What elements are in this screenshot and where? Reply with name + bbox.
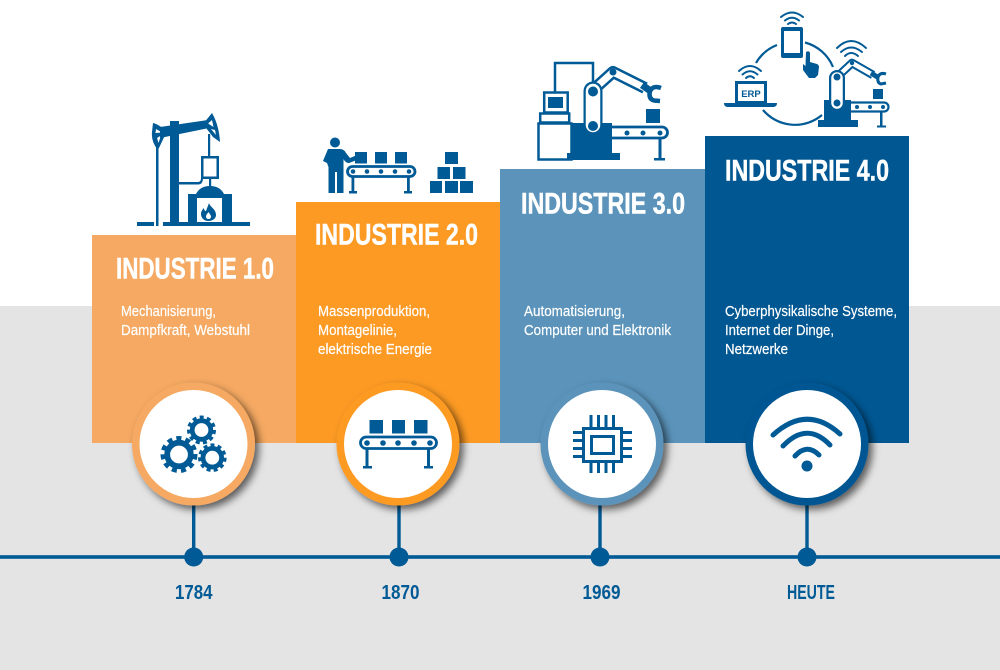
text: Industrie 2.0 description: Massenproduktion, (318, 304, 430, 320)
panel: Industrie 1.0 (92, 235, 296, 443)
panel: Industrie 2.0 (296, 202, 500, 443)
heading: Industrie 3.0: INDUSTRIE 3.0 (521, 188, 685, 220)
icon: robot arm and computer (538, 63, 668, 160)
text: Industrie 4.0 description: Cyberphysikalische Systeme, (725, 304, 897, 320)
wifi signals (739, 12, 866, 78)
text: Industrie 1.0 description: Mechanisierung, (121, 304, 216, 320)
badge: microchip (540, 382, 664, 506)
ERP label: ERP (741, 89, 761, 100)
year: 1969: 1969 (582, 581, 620, 604)
hand (803, 51, 819, 78)
text: Industrie 2.0 description (318, 304, 432, 358)
text: Industrie 4.0 description (725, 304, 897, 358)
heading: Industrie 4.0: INDUSTRIE 4.0 (725, 154, 889, 188)
text: Industrie 1.0 description (121, 304, 250, 339)
tablet (781, 27, 803, 58)
panel: Industrie 4.0 (705, 136, 909, 443)
icon: connected systems (724, 12, 888, 128)
text: Industrie 3.0 description (524, 304, 672, 339)
text: Industrie 2.0 description: Montagelinie, (318, 323, 397, 339)
year: heute: HEUTE (787, 581, 835, 604)
text: Industrie 1.0 description: Dampfkraft, Webstuhl (121, 323, 250, 339)
text: Industrie 4.0 description: Netzwerke (725, 342, 788, 358)
badge: wifi (746, 382, 868, 506)
text: Industrie 3.0 description: Automatisierung, (524, 304, 625, 320)
timeline (0, 505, 1000, 566)
icon: worker at conveyor with boxes (323, 138, 473, 194)
laptop (724, 81, 777, 107)
heading: Industrie 1.0: INDUSTRIE 1.0 (116, 252, 274, 286)
text: Industrie 2.0 description: elektrische Energie (318, 342, 432, 358)
heading: Industrie 2.0: INDUSTRIE 2.0 (315, 218, 478, 252)
grey background band (0, 306, 1000, 670)
robot (824, 100, 851, 122)
text: Industrie 3.0 description: Computer und Elektronik (524, 323, 672, 339)
badge: conveyor belt (336, 382, 460, 506)
text: Industrie 4.0 description: Internet der Dinge, (725, 323, 834, 339)
icon: steam engine (137, 113, 250, 226)
badge: gears (132, 382, 255, 506)
cycle arcs (756, 42, 833, 125)
year: 1870: 1870 (382, 581, 420, 604)
year: 1784: 1784 (175, 581, 213, 604)
panel: Industrie 3.0 (500, 169, 705, 443)
